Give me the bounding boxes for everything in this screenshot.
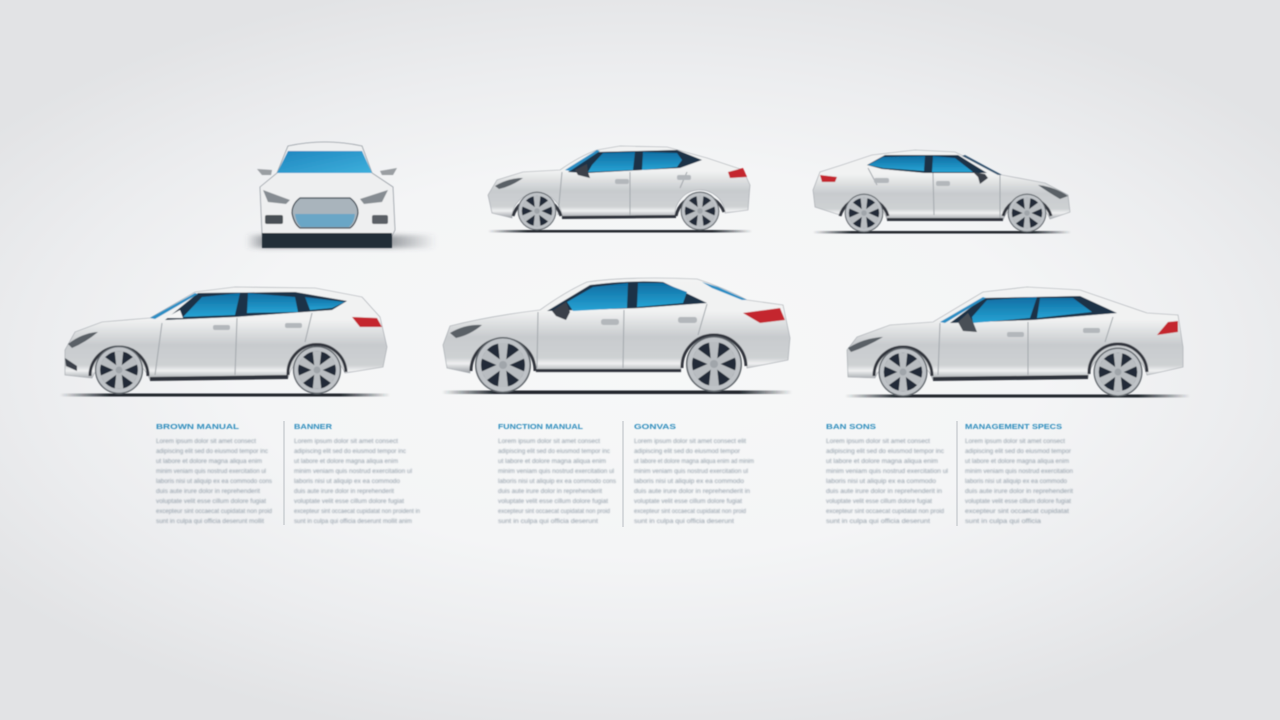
column 5 body: adipiscing elit sed do eiusmod tempor inc bbox=[826, 448, 945, 455]
column 4 body: ut labore et dolore magna aliqua enim ad minim bbox=[634, 458, 754, 465]
top right window frame bbox=[867, 155, 987, 173]
front car grille lower panel bbox=[295, 214, 355, 227]
top middle tail light bbox=[728, 168, 747, 178]
column 2 body: minim veniam quis nostrud exercitation ul bbox=[294, 468, 413, 475]
right sedan sill bbox=[933, 375, 1088, 381]
column 5 body bbox=[826, 438, 949, 525]
column 5 heading: BAN SONS bbox=[826, 422, 876, 431]
centre sedan sill bbox=[536, 369, 681, 372]
front car right fog lamp bbox=[372, 215, 388, 224]
column 6 body bbox=[965, 438, 1073, 525]
centre sedan mirror bbox=[552, 302, 570, 320]
right sedan wheel arches bbox=[874, 344, 1147, 376]
top middle car body bbox=[488, 146, 750, 218]
column 5 body: Lorem ipsum dolor sit amet consect bbox=[826, 438, 930, 445]
column 2 body: excepteur sint occaecat cupidatat non proident in bbox=[294, 508, 420, 515]
hatchback front grille bbox=[65, 358, 77, 371]
column 3 heading: FUNCTION MANUAL bbox=[498, 422, 583, 431]
column 4 body: adipiscing elit sed do eiusmod tempor bbox=[634, 448, 741, 455]
column 2 body: adipiscing elit sed do eiusmod tempor inc bbox=[294, 448, 407, 455]
top middle car ground shadow bbox=[488, 230, 752, 232]
top middle rear wheel bbox=[681, 192, 719, 230]
column 4 heading: GONVAS bbox=[634, 422, 676, 431]
right sedan windows bbox=[972, 297, 1092, 323]
column 1 body: excepteur sint occaecat cupidatat non proid bbox=[156, 508, 272, 515]
centre sedan wheel arches bbox=[471, 335, 746, 371]
top right car ground shadow bbox=[813, 231, 1071, 234]
column 1 body: adipiscing elit sed do eiusmod tempor inc bbox=[156, 448, 269, 455]
centre sedan body bbox=[443, 278, 790, 373]
top middle door lines bbox=[558, 172, 687, 215]
top right headlight bbox=[1038, 185, 1068, 199]
centre sedan rear wheel bbox=[686, 336, 742, 392]
text column 2 bbox=[294, 422, 420, 525]
column 3 body: excepteur sint occaecat cupidatat non proid bbox=[498, 508, 610, 515]
column 2 heading: BANNER bbox=[294, 422, 333, 431]
column 4 body: laboris nisi ut aliquip ex ea commodo bbox=[634, 478, 744, 485]
top middle handles bbox=[615, 175, 691, 184]
column 6 body: adipiscing elit sed do eiusmod tempor bbox=[965, 448, 1072, 455]
centre sedan ground shadow bbox=[442, 390, 792, 394]
column 6 body: Lorem ipsum dolor sit amet consect bbox=[965, 438, 1065, 445]
text column 1 bbox=[156, 422, 273, 525]
column 4 body: duis aute irure dolor in reprehenderit in bbox=[634, 488, 750, 495]
hatchback mirror bbox=[165, 310, 183, 318]
column 5 body: laboris nisi ut aliquip ex ea commodo bbox=[826, 478, 936, 485]
column 5 body: minim veniam quis nostrud exercitation ul bbox=[826, 468, 949, 475]
column 3 body: duis aute irure dolor in reprehenderit bbox=[498, 488, 602, 495]
hatchback headlight bbox=[68, 332, 98, 348]
column 2 body: duis aute irure dolor in reprehenderit bbox=[294, 488, 394, 495]
hatchback front wheel bbox=[95, 346, 143, 394]
top middle windows bbox=[588, 152, 682, 172]
column 3 body: sunt in culpa qui officia deserunt bbox=[498, 518, 598, 525]
top right sill bbox=[887, 218, 1003, 221]
top middle windshield strip bbox=[565, 150, 600, 171]
top right car body bbox=[813, 150, 1070, 220]
centre sedan headlight bbox=[450, 325, 482, 338]
column 6 body: ut labore et dolore magna aliqua enim bbox=[965, 458, 1069, 465]
column 3 body: adipiscing elit sed do eiusmod tempor inc bbox=[498, 448, 611, 455]
text column 3 bbox=[498, 422, 617, 525]
hatchback window frame bbox=[165, 292, 347, 320]
column 2 body: laboris nisi ut aliquip ex ea commodo bbox=[294, 478, 400, 485]
top right rear wheel bbox=[845, 194, 883, 232]
right sedan tail light bbox=[1157, 321, 1178, 335]
front car left fog lamp bbox=[265, 215, 283, 224]
car: middle right sedan bbox=[845, 287, 1190, 398]
column 3 body: Lorem ipsum dolor sit amet consect bbox=[498, 438, 600, 445]
column 3 body: ut labore et dolore magna aliqua enim bbox=[498, 458, 606, 465]
car: middle centre sedan bbox=[442, 278, 792, 394]
centre sedan tail light bbox=[743, 308, 785, 323]
right sedan rear wheel bbox=[1094, 348, 1142, 396]
column 1 body bbox=[156, 438, 273, 525]
car: top middle side view bbox=[488, 146, 752, 232]
column 1 heading: BROWN MANUAL bbox=[156, 422, 240, 431]
front car body bbox=[260, 142, 395, 236]
car: front view bbox=[246, 142, 436, 248]
right sedan ground shadow bbox=[845, 394, 1190, 398]
front car left mirror bbox=[257, 169, 272, 175]
hatchback wheel arches bbox=[90, 344, 346, 376]
top right door lines bbox=[868, 168, 1000, 218]
text column 4 bbox=[634, 422, 754, 525]
top middle mirror bbox=[575, 164, 590, 178]
column 6 body: minim veniam quis nostrud exercitation bbox=[965, 468, 1073, 475]
right sedan door lines bbox=[938, 317, 1113, 375]
column 1 body: duis aute irure dolor in reprehenderit bbox=[156, 488, 260, 495]
front car right headlight bbox=[360, 190, 388, 204]
column 5 body: sunt in culpa qui officia deserunt bbox=[826, 518, 930, 525]
front car right mirror bbox=[380, 168, 397, 175]
top right handles bbox=[874, 178, 950, 186]
column 4 body: voluptate velit esse cillum dolore fugiat bbox=[634, 498, 742, 505]
centre sedan rear window strip bbox=[702, 282, 747, 300]
column 1 body: ut labore et dolore magna aliqua enim bbox=[156, 458, 262, 465]
top right mirror bbox=[973, 172, 988, 184]
right sedan body bbox=[847, 287, 1183, 380]
front car grille bbox=[292, 198, 358, 228]
column 2 body: Lorem ipsum dolor sit amet consect bbox=[294, 438, 398, 445]
column 6 body: sunt in culpa qui officia bbox=[965, 518, 1041, 525]
hatchback ground shadow bbox=[60, 394, 390, 396]
column 6 heading: MANAGEMENT SPECS bbox=[965, 422, 1062, 431]
top middle headlight bbox=[495, 178, 523, 189]
column 3 body: voluptate velit esse cillum dolore fugiat bbox=[498, 498, 608, 505]
column 4 body: sunt in culpa qui officia deserunt bbox=[634, 518, 734, 525]
text column 6 bbox=[965, 422, 1073, 525]
column 5 body: voluptate velit esse cillum dolore fugiat bbox=[826, 498, 932, 505]
column 4 body: excepteur sint occaecat cupidatat non proid bbox=[634, 508, 746, 515]
right sedan front wheel bbox=[878, 348, 928, 396]
hatchback sill bbox=[150, 375, 288, 381]
centre sedan windows bbox=[567, 283, 687, 311]
right sedan window frame bbox=[950, 296, 1117, 323]
top middle window frame bbox=[568, 150, 702, 173]
column 5 body: excepteur sint occaecat cupidatat non proid bbox=[826, 508, 944, 515]
hatchback windshield strip bbox=[150, 293, 198, 319]
top middle wheel arches bbox=[513, 196, 724, 216]
hatchback rear wheel bbox=[293, 346, 341, 394]
column 1 body: minim veniam quis nostrud exercitation ul bbox=[156, 468, 267, 475]
column 5 body: ut labore et dolore magna aliqua enim bbox=[826, 458, 938, 465]
column 4 body bbox=[634, 438, 754, 525]
column 2 body: ut labore et dolore magna aliqua enim bbox=[294, 458, 398, 465]
column 6 body: laboris nisi ut aliquip ex ea commodo bbox=[965, 478, 1067, 485]
top middle sill bbox=[562, 215, 676, 219]
column 3 body: laboris nisi ut aliquip ex ea commodo cons bbox=[498, 478, 617, 485]
column 3 body: minim veniam quis nostrud exercitation ul bbox=[498, 468, 615, 475]
front car ground shadow bbox=[246, 235, 436, 248]
hatchback body bbox=[65, 287, 387, 380]
column 6 body: duis aute irure dolor in reprehenderit bbox=[965, 488, 1073, 495]
column 3 body bbox=[498, 438, 617, 525]
hatchback door lines bbox=[155, 313, 312, 375]
right sedan headlight bbox=[848, 337, 883, 352]
column 1 body: laboris nisi ut aliquip ex ea commodo cons bbox=[156, 478, 273, 485]
column 1 body: Lorem ipsum dolor sit amet consect bbox=[156, 438, 256, 445]
top right windshield strip bbox=[962, 155, 1002, 175]
hatchback tail light bbox=[352, 317, 382, 327]
centre sedan window frame bbox=[547, 281, 707, 311]
column 2 body: sunt in culpa qui officia deserunt mollit anim bbox=[294, 518, 412, 525]
centre sedan front wheel bbox=[475, 337, 531, 393]
top right windows bbox=[868, 156, 973, 172]
column 6 body: voluptate velit esse cillum dolore fugiat bbox=[965, 498, 1071, 505]
centre sedan door lines bbox=[537, 304, 707, 368]
right sedan windshield strip bbox=[940, 297, 986, 323]
top right wheel arches bbox=[840, 198, 1051, 216]
car: top right side view bbox=[813, 150, 1071, 234]
column 2 body: voluptate velit esse cillum dolore fugiat bbox=[294, 498, 404, 505]
front car windshield bbox=[277, 151, 372, 173]
centre sedan handles bbox=[601, 317, 697, 325]
column 5 body: duis aute irure dolor in reprehenderit in bbox=[826, 488, 942, 495]
top middle front wheel bbox=[518, 192, 556, 230]
column 4 body: Lorem ipsum dolor sit amet consect elit bbox=[634, 438, 746, 445]
front car bumper bar bbox=[262, 233, 392, 248]
top right front wheel bbox=[1008, 194, 1046, 232]
text column 5 bbox=[826, 422, 949, 525]
column 1 body: voluptate velit esse cillum dolore fugiat bbox=[156, 498, 266, 505]
column 1 body: sunt in culpa qui officia deserunt mollit bbox=[156, 518, 264, 525]
column 2 body bbox=[294, 438, 420, 525]
top right tail light bbox=[820, 175, 837, 182]
right sedan mirror bbox=[958, 313, 977, 332]
front car left headlight bbox=[263, 190, 290, 204]
column 6 body: excepteur sint occaecat cupidatat bbox=[965, 508, 1069, 515]
hatchback windows bbox=[183, 293, 345, 317]
car: middle left hatchback bbox=[60, 287, 390, 396]
hatchback handles bbox=[213, 323, 302, 330]
column 4 body: minim veniam quis nostrud exercitation ul bbox=[634, 468, 749, 475]
right sedan handles bbox=[1007, 328, 1100, 337]
